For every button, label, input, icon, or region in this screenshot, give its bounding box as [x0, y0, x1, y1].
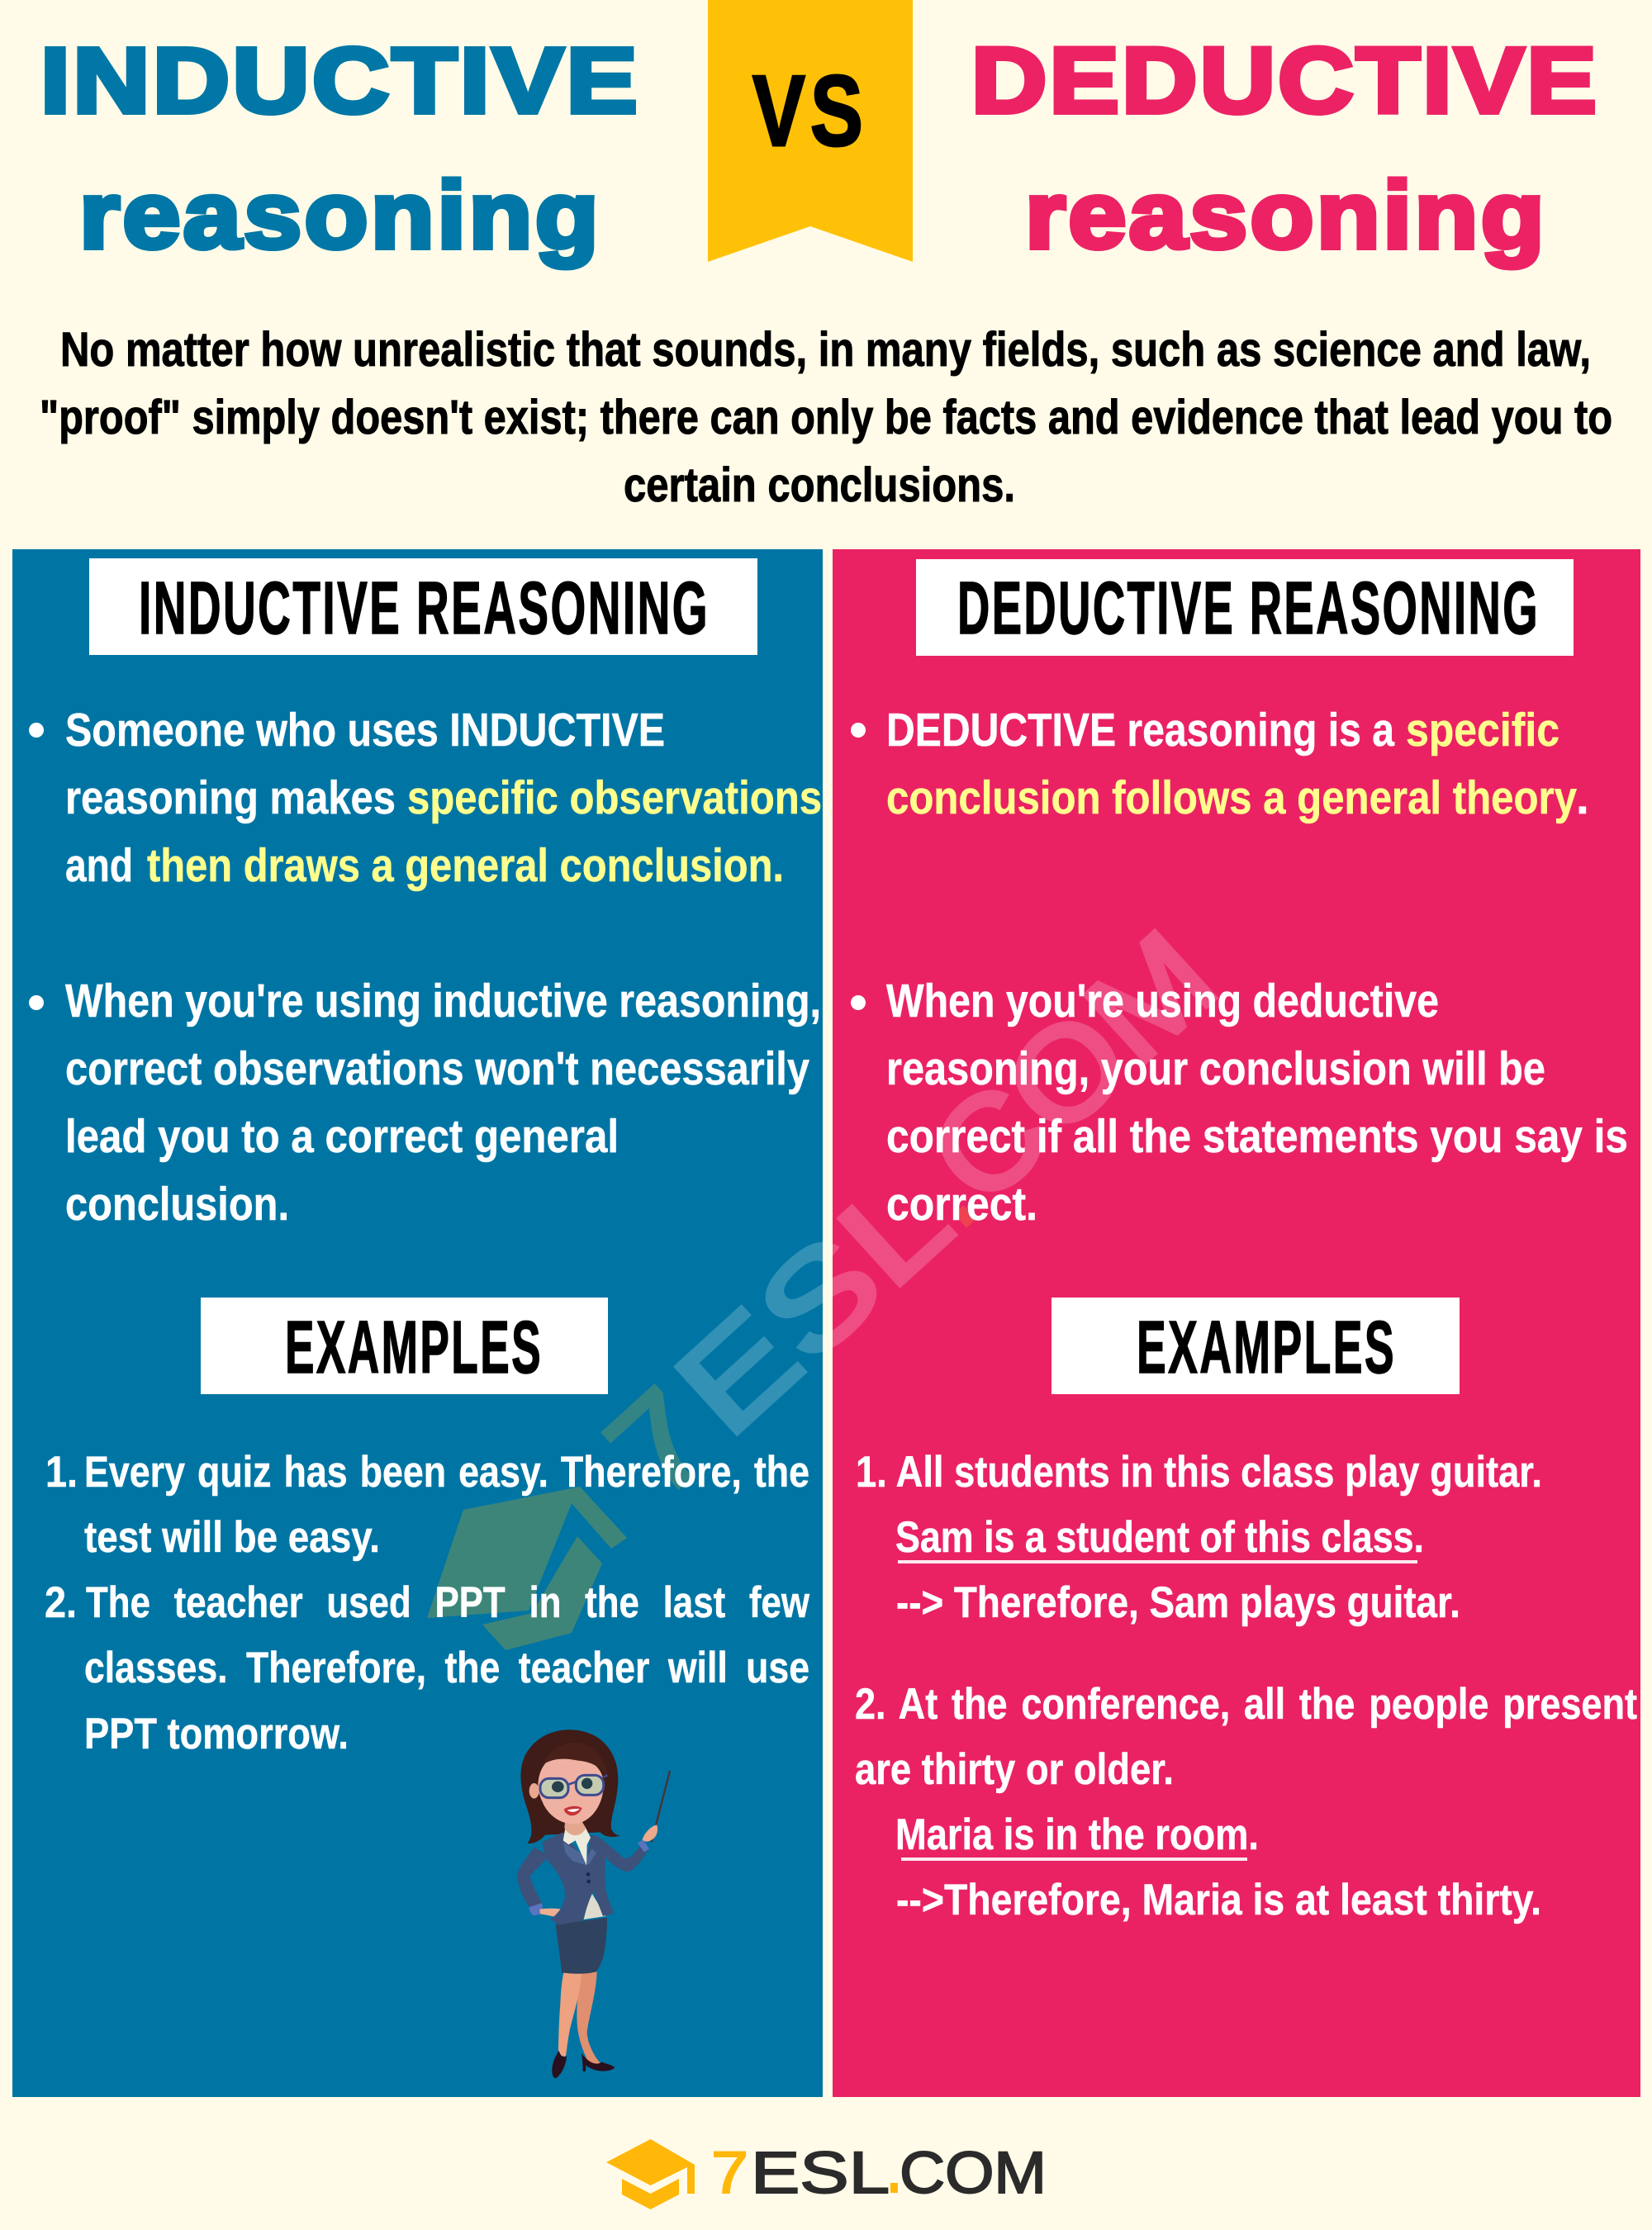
- panel: deductive background: [833, 549, 1640, 2097]
- title: inductive reasoning: INDUCTIVE: [40, 29, 640, 132]
- hair fringe: [543, 1743, 609, 1780]
- bullet: specific observations: then draws a general conclusion.: [147, 839, 784, 892]
- bullet: correct conclusion: [851, 975, 1628, 1231]
- example list: [45, 1448, 810, 1758]
- bullet: specific observations: and: [65, 839, 133, 892]
- example two: Maria is in the room.: [895, 1810, 1259, 1859]
- lapels: [563, 1843, 596, 1865]
- bullet: specific conclusion: .: [1576, 771, 1589, 824]
- bullet: specific observations: [29, 704, 822, 892]
- eyes: [552, 1782, 564, 1792]
- title: inductive reasoning: [40, 29, 640, 268]
- watermark: 7ESL.COM: .: [881, 1126, 998, 1251]
- bullet: correct observations: conclusion.: [65, 1178, 289, 1231]
- face: [538, 1755, 604, 1824]
- right leg: [577, 1971, 601, 2066]
- logo: 7ESL.COM: [606, 2139, 1047, 2209]
- title: deductive reasoning: [971, 29, 1599, 268]
- example list: Every quiz has been easy. Therefore, the: [84, 1448, 809, 1497]
- shoes: [552, 2051, 615, 2078]
- bullet: specific conclusion: [851, 704, 1589, 824]
- vs ribbon: VS: [752, 55, 868, 167]
- bullet: specific observations: specific observations: [407, 771, 822, 824]
- example list: The teacher used PPT in the last few: [86, 1578, 810, 1627]
- title: inductive reasoning: reasoning: [79, 163, 601, 268]
- heading: examples: EXAMPLES: [285, 1307, 543, 1389]
- bullet: correct conclusion: correct.: [886, 1178, 1037, 1231]
- lips: [564, 1806, 582, 1815]
- bullet: specific observations: Someone who uses INDUCTIVE: [65, 704, 665, 757]
- bullet: correct observations: correct observations won't necessarily: [65, 1042, 809, 1095]
- panel content: inductive reasoning: [29, 558, 822, 1758]
- example one: --> Therefore, Sam plays guitar.: [896, 1578, 1460, 1627]
- example two: are thirty or older.: [855, 1745, 1174, 1794]
- heading: examples: [1051, 1298, 1460, 1394]
- logo wordmark: [711, 2141, 1047, 2206]
- example list: 1.: [45, 1448, 78, 1497]
- intro text: [40, 323, 1612, 512]
- title: deductive reasoning: reasoning: [1025, 163, 1547, 268]
- bullet: specific observations: reasoning makes: [65, 771, 396, 824]
- jacket: [543, 1832, 648, 1925]
- intro text: certain conclusions.: [624, 458, 1015, 512]
- blouse bottom: [584, 1891, 605, 1919]
- left arm: [517, 1848, 549, 1908]
- watermark: 7ESL.COM: 7: [580, 1362, 739, 1525]
- example two: [855, 1680, 1637, 1924]
- heading: inductive reasoning: INDUCTIVE REASONING: [139, 567, 710, 650]
- example one: 1. All students in this class play guitar.: [856, 1448, 1542, 1497]
- heading: examples: [201, 1298, 608, 1394]
- logo wordmark: ESL: [751, 2141, 890, 2206]
- watermark: 7ESL.COM: [427, 904, 1242, 1650]
- example list: PPT tomorrow.: [84, 1710, 349, 1758]
- bullet: specific conclusion: specific: [1406, 704, 1559, 757]
- watermark: 7ESL.COM: COM: [903, 904, 1242, 1231]
- neck: [564, 1820, 586, 1835]
- example list: classes. Therefore, the teacher will use: [84, 1644, 809, 1692]
- logo wordmark: 7: [711, 2141, 748, 2206]
- pointer stick: [652, 1771, 670, 1843]
- bullet: correct conclusion: When you're using deductive: [886, 975, 1439, 1027]
- bullet: specific conclusion: DEDUCTIVE reasoning is a: [886, 704, 1395, 757]
- glasses: [540, 1775, 604, 1798]
- heading: examples: EXAMPLES: [1137, 1307, 1396, 1389]
- example two: -->Therefore, Maria is at least thirty.: [896, 1876, 1541, 1924]
- title: deductive reasoning: DEDUCTIVE: [971, 29, 1599, 132]
- collar and blouse: [563, 1825, 591, 1865]
- heading: inductive reasoning: [89, 558, 757, 655]
- watermark: 7ESL.COM: ESL: [648, 1145, 977, 1463]
- skirt: [556, 1918, 607, 1974]
- panel content: deductive reasoning: [851, 559, 1637, 1924]
- example one: [856, 1448, 1542, 1627]
- example list: 2.: [45, 1578, 77, 1627]
- bullet: correct observations: When you're using inductive reasoning,: [65, 975, 821, 1027]
- hair back: [520, 1729, 620, 1843]
- buttons: [586, 1872, 590, 1877]
- icon: teacher character: [517, 1729, 670, 2078]
- cuff and hand: [638, 1839, 649, 1853]
- bullet: correct observations: lead you to a correct general: [65, 1110, 619, 1163]
- vs ribbon: [708, 0, 913, 262]
- example list: test will be easy.: [84, 1513, 380, 1562]
- bullet: correct observations: [29, 975, 821, 1231]
- logo wordmark: COM: [900, 2141, 1047, 2206]
- left leg: [558, 1972, 582, 2057]
- panel: inductive background: [12, 549, 823, 2097]
- left hand: [539, 1909, 568, 1918]
- ear: [529, 1783, 539, 1799]
- example one: Sam is a student of this class.: [895, 1513, 1424, 1562]
- bullet: correct conclusion: reasoning, your conclusion will be: [886, 1042, 1545, 1095]
- icon: graduation cap: [606, 2139, 695, 2209]
